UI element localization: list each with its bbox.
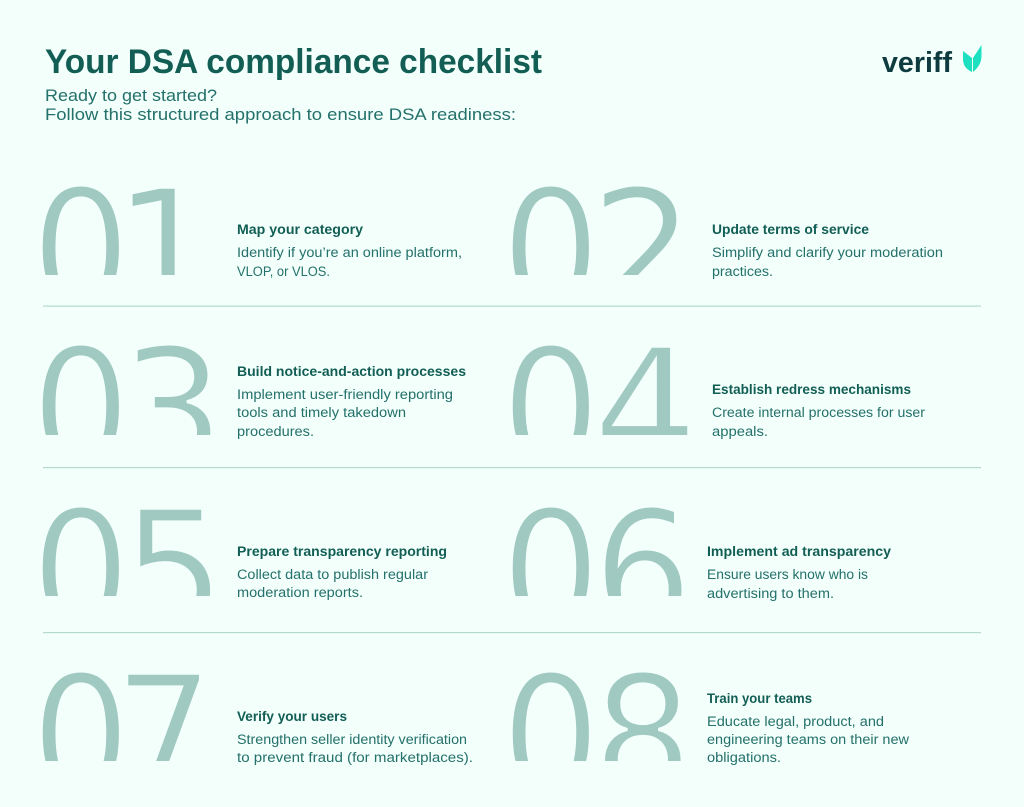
- item 06: [512, 508, 891, 601]
- item 08: [512, 672, 909, 765]
- text: prepare transparency reporting: [237, 544, 447, 600]
- text: implement ad transparency: Implement ad transparency: [707, 544, 892, 559]
- text: build notice-and-action processes: tools and timely takedown: [237, 405, 406, 420]
- number 05: 5: [121, 476, 226, 668]
- text: update terms of service: [712, 222, 943, 279]
- text: prepare transparency reporting: moderation reports.: [237, 585, 363, 600]
- logo: veriff: veriff: [882, 47, 952, 79]
- text: prepare transparency reporting: Collect data to publish regular: [237, 567, 429, 582]
- number 05: [42, 508, 210, 596]
- text: build notice-and-action processes: [237, 364, 466, 439]
- text: build notice-and-action processes: procedures.: [237, 424, 314, 439]
- text: map your category: [237, 222, 462, 279]
- subtitle: Follow this structured approach to ensure DSA readiness:: [45, 105, 516, 124]
- text: establish redress mechanisms: [712, 382, 926, 439]
- number 07: [42, 672, 199, 761]
- subtitle: Ready to get started?: [45, 86, 217, 105]
- header: [45, 43, 542, 124]
- item 03: [42, 346, 466, 439]
- text: verify your users: to prevent fraud (for marketplaces).: [237, 750, 473, 765]
- title: Your DSA compliance checklist: [45, 43, 542, 81]
- number 05: 0: [31, 476, 131, 667]
- number 06: 0: [501, 476, 601, 667]
- text: implement ad transparency: [707, 544, 892, 601]
- text: map your category: VLOP, or VLOS.: [237, 264, 330, 279]
- text: establish redress mechanisms: appeals.: [712, 424, 768, 439]
- text: train your teams: engineering teams on their new: [707, 732, 909, 747]
- text: build notice-and-action processes: Implement user-friendly reporting: [237, 387, 453, 402]
- item 02: [512, 186, 942, 279]
- number 06: 6: [593, 476, 693, 667]
- number 04: [512, 346, 688, 435]
- text: update terms of service: Simplify and clarify your moderation: [712, 245, 943, 260]
- text: map your category: Map your category: [237, 222, 364, 237]
- text: verify your users: Verify your users: [237, 709, 347, 724]
- text: establish redress mechanisms: Create internal processes for user: [712, 405, 926, 420]
- number 02: [512, 186, 676, 275]
- number 06: [512, 508, 682, 596]
- number 01: 1: [113, 154, 218, 346]
- number 03: [42, 346, 210, 435]
- number 02: 0: [501, 155, 601, 346]
- item 07: [42, 672, 472, 765]
- text: build notice-and-action processes: Build notice-and-action processes: [237, 364, 466, 379]
- text: update terms of service: practices.: [712, 264, 773, 279]
- text: verify your users: Strengthen seller identity verification: [237, 732, 467, 747]
- number 04: 0: [501, 314, 601, 505]
- number 03: 0: [31, 314, 131, 505]
- text: implement ad transparency: Ensure users know who is: [707, 567, 868, 582]
- number 03: 3: [120, 314, 225, 506]
- text: train your teams: Train your teams: [707, 691, 812, 706]
- item 05: [42, 508, 446, 600]
- item 01: [42, 186, 461, 278]
- text: update terms of service: Update terms of service: [712, 222, 870, 237]
- text: prepare transparency reporting: Prepare transparency reporting: [237, 544, 447, 559]
- number 01: [42, 186, 175, 275]
- number 08: [512, 672, 681, 761]
- item 04: [512, 346, 925, 439]
- text: verify your users: [237, 709, 473, 765]
- text: establish redress mechanisms: Establish redress mechanisms: [712, 382, 911, 397]
- text: train your teams: obligations.: [707, 750, 781, 765]
- number 02: 2: [590, 154, 695, 346]
- text: map your category: Identify if you’re an online platform,: [237, 245, 462, 260]
- subtitle: [45, 86, 516, 124]
- number 04: 4: [593, 314, 698, 506]
- text: train your teams: Educate legal, product, and: [707, 714, 884, 729]
- text: implement ad transparency: advertising to them.: [707, 586, 834, 601]
- text: train your teams: [707, 691, 909, 765]
- number 01: 0: [31, 155, 131, 346]
- logo: veriff: [882, 45, 982, 79]
